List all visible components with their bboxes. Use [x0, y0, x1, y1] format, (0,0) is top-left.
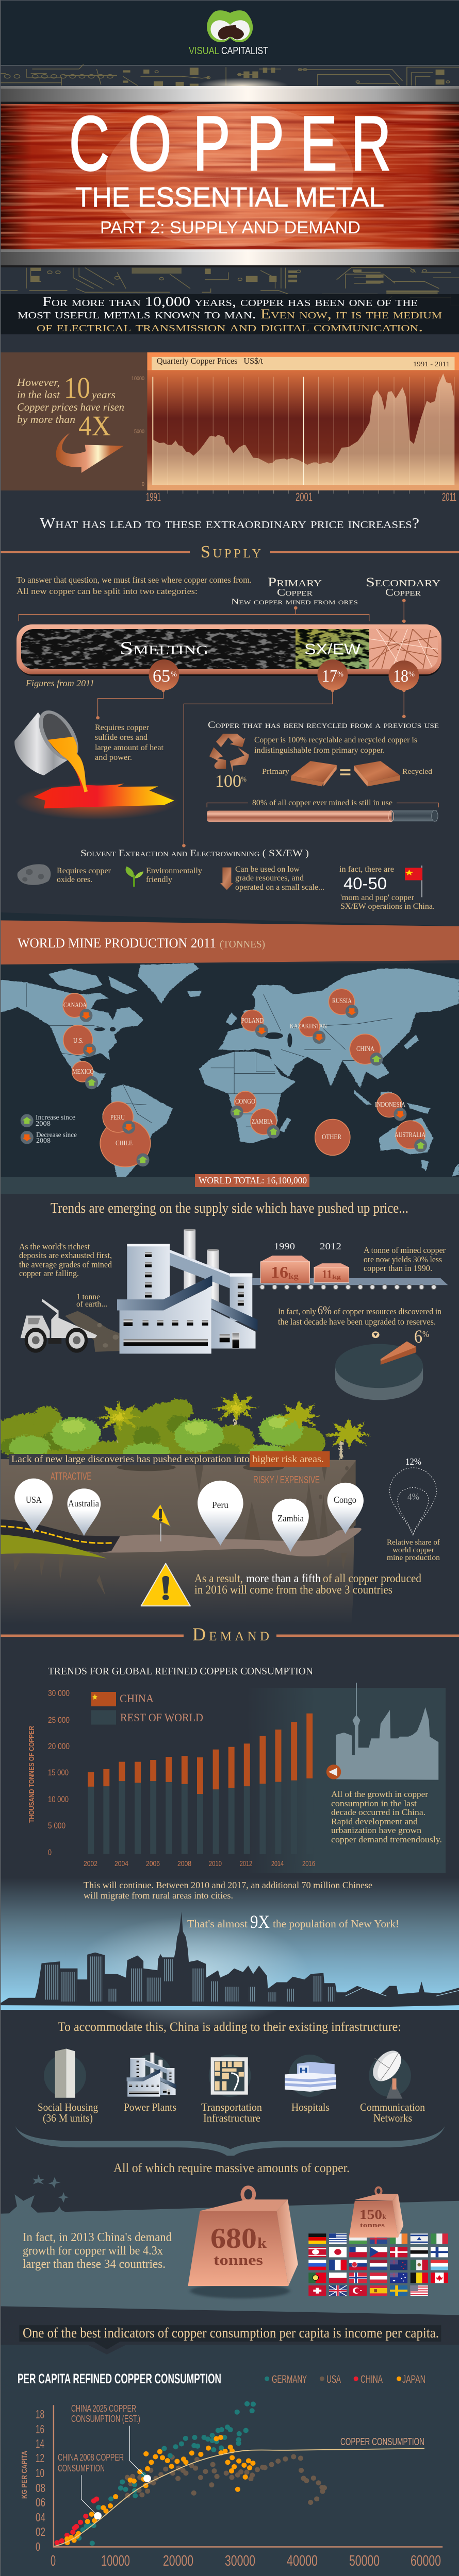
map legend: 2008: [36, 1137, 51, 1145]
panel: china skyline commentary: Rapid development and: [331, 1817, 418, 1826]
bubble: 18 percent: 18: [393, 667, 408, 686]
illustration: cliff with road: [0, 1459, 362, 1625]
infrastructure labels: Power Plants: [124, 2101, 176, 2113]
scatter plot legend: [265, 2374, 425, 2385]
infrastructure labels: Social Housing: [38, 2101, 98, 2113]
country labels: CANADA: [63, 1002, 87, 1009]
bar chart: global refined copper consumption: [27, 1688, 315, 1868]
panel: chinese flag stars and teal band: [0, 2174, 459, 2315]
world total band: [0, 1174, 459, 1194]
banner: world mine production: [0, 920, 459, 964]
text: grades falling: deposits are exhausted first,: [19, 1250, 112, 1260]
panel: 10 year price rise callout: However,: [17, 376, 60, 388]
text: migration: will migrate from rural areas into cities.: [84, 1890, 233, 1901]
chart legend: REST OF WORLD: [120, 1711, 203, 1724]
scatter chart: consumption vs income: CHINA 2025 COPPER: [71, 2403, 136, 2414]
supply intro text: [17, 575, 252, 596]
text: smelting description: Requires copper: [95, 723, 150, 732]
flags: 34 countries: [308, 2233, 448, 2296]
scatter chart: consumption vs income: 50000: [349, 2553, 380, 2569]
conveyor and copper boxes: 1990: [274, 1241, 295, 1251]
map legend: 2008: [36, 1120, 51, 1128]
recycling text: 100: [215, 772, 241, 791]
text: 6 percent upgraded: 6%: [318, 1304, 332, 1317]
country labels: PERU: [110, 1114, 125, 1122]
recycling text: %: [241, 775, 247, 784]
icon: curved copper arrow: [56, 433, 124, 473]
scatter chart: consumption vs income: 14: [36, 2437, 44, 2450]
item: low grade, small scale: operated on a small scale...: [235, 883, 324, 892]
bar chart: global refined copper consumption: THOUSAND TONNES OF COPPER: [27, 1726, 36, 1823]
bar chart: global refined copper consumption: 0: [48, 1848, 52, 1857]
icon: city map: [211, 2057, 248, 2095]
panel: 10 year price rise callout: 10: [64, 371, 90, 404]
bar chart: global refined copper consumption: 2010: [209, 1859, 222, 1868]
weight: china 680k tonnes: tonnes: [214, 2252, 263, 2268]
panel: china skyline commentary: decade occurred in China.: [331, 1807, 425, 1817]
scatter chart: consumption vs income: [20, 2401, 442, 2576]
map legend: Increase since: [36, 1114, 75, 1122]
scatter chart: consumption vs income: CONSUMPTION: [58, 2463, 105, 2473]
chart: relative share pins: [387, 1456, 440, 1562]
capsule: share of copper supply by method: Smelting: [120, 638, 208, 658]
intro text band: of electrical transmission and digital communication.: [37, 319, 423, 334]
country labels: [63, 997, 426, 1147]
heading: infrastructure: To accommodate this, China is adding to their existing infrastructure:: [58, 2020, 401, 2034]
infrastructure labels: Networks: [373, 2112, 412, 2124]
item: oxide ores: Requires copper: [57, 867, 111, 875]
panel: 10 year price rise callout: years: [91, 388, 116, 401]
scatter chart: consumption vs income: 18: [36, 2408, 44, 2421]
text: migration: This will continue. Between 2010 and 2017, an additional 70 million Chinese: [84, 1880, 372, 1890]
chart: quarterly copper prices: [147, 352, 459, 494]
icon: housing tower: [55, 2048, 75, 2098]
recycling text: Copper is 100% recyclable and recycled copper is: [254, 736, 417, 744]
map pins: [14, 1479, 364, 1552]
world total band: WORLD TOTAL: 16,100,000: [199, 1175, 307, 1185]
icon: copper plates equal: [291, 761, 400, 786]
recycling text: [215, 736, 433, 791]
primary / secondary labels: Copper: [277, 587, 313, 598]
primary / secondary labels: Copper: [385, 587, 421, 598]
panel: 10 year price rise callout: Copper prices have risen: [17, 401, 124, 413]
recycling text: indistinguishable from primary copper.: [254, 746, 385, 755]
infrastructure labels: Infrastructure: [203, 2112, 260, 2124]
text: grades falling: the average grades of mined: [19, 1260, 112, 1269]
item: environmentally friendly: friendly: [146, 875, 172, 884]
country labels: MEXICO: [72, 1068, 94, 1076]
chart legend: [91, 1692, 203, 1725]
soft light above the metal bar: [196, 78, 289, 94]
item: mom and pop operations: in fact, there are: [339, 865, 394, 874]
bar chart: global refined copper consumption: 15 000: [48, 1768, 69, 1777]
weight: other countries 150k tonnes: k: [382, 2213, 386, 2221]
panel: china skyline commentary: urbanization have grown: [331, 1825, 422, 1835]
scatter chart: consumption vs income: 12: [36, 2451, 44, 2465]
text band: higher risk areas: [9, 1451, 330, 1467]
infrastructure labels: Communication: [360, 2101, 425, 2113]
recycling text: Primary: [262, 768, 290, 776]
country labels: INDONESIA: [375, 1101, 406, 1109]
map pins: USA: [26, 1495, 42, 1505]
text: 6 percent upgraded: of copper resources discovered in: [334, 1307, 441, 1316]
bubble: 65 percent: [149, 659, 179, 690]
item: environmentally friendly: [126, 867, 202, 887]
bubble: 18 percent: %: [408, 670, 415, 679]
conveyor and copper boxes: kg: [332, 1273, 341, 1280]
label: 1 tonne of earth: 1 tonne: [76, 1293, 100, 1301]
text: more than a fifth: more than a fifth: [246, 1572, 321, 1585]
weight: china 680k tonnes: k: [257, 2235, 267, 2251]
banner: world mine production: (TONNES): [220, 939, 265, 950]
circuit board band bottom: [0, 268, 459, 294]
map legend: [36, 1114, 77, 1145]
chart labels: 2001: [296, 490, 313, 503]
heading: supply: Supply: [201, 543, 261, 562]
country labels: RUSSIA: [332, 997, 352, 1005]
text: smelting description: and power.: [95, 753, 132, 762]
chart labels: 10000: [132, 376, 144, 382]
bar chart: global refined copper consumption: 30 000: [48, 1688, 70, 1698]
country labels: POLAND: [241, 1017, 264, 1025]
capsule: share of copper supply by method: [17, 624, 441, 690]
panel: 10 year price rise callout: 4X: [78, 410, 111, 442]
illustration: new york skyline: [0, 1878, 459, 2030]
chart: relative share pins: Relative share of: [387, 1538, 440, 1547]
item: mom and pop operations: 40-50: [343, 874, 387, 893]
copper still in use pipe: [207, 799, 438, 822]
bar chart: global refined copper consumption: 2004: [114, 1859, 128, 1868]
scatter chart: consumption vs income: 0: [36, 2540, 40, 2553]
scatter chart: consumption vs income: CHINA 2008 COPPER: [58, 2452, 124, 2463]
illustration: jungle trees: [0, 1392, 371, 1461]
chart labels: 5000: [134, 429, 144, 435]
text band: higher risk areas: higher risk areas.: [252, 1454, 324, 1465]
text: demand growth: In fact, in 2013 China's demand: [23, 2231, 172, 2244]
part title: PART 2: SUPPLY AND DEMAND: [100, 218, 360, 238]
panel: 10 year price rise callout: in the last: [17, 388, 60, 401]
chart labels: Quarterly Copper Prices US$/t: [157, 356, 263, 366]
main title: COPPER: [69, 100, 391, 187]
item: mom and pop operations: [339, 865, 435, 911]
chart labels: 0: [142, 481, 144, 487]
intro text band: [0, 294, 459, 334]
bar chart: global refined copper consumption: 2008: [177, 1859, 191, 1868]
scatter chart: consumption vs income: 10000: [101, 2553, 130, 2569]
bubble: 17 percent: %: [337, 670, 343, 679]
scatter chart: consumption vs income: 40000: [287, 2553, 318, 2569]
chart: relative share pins: mine production: [387, 1554, 440, 1562]
text: grades falling: As the world's richest: [19, 1242, 90, 1251]
primary / secondary labels: [231, 575, 440, 606]
pie chart: 6 percent: [335, 1326, 429, 1400]
country labels: CHINA: [356, 1045, 375, 1053]
icon: road warning sign: [151, 1504, 170, 1541]
bubble: 17 percent: 17: [322, 667, 337, 686]
title plate: copper band with silver bars: [0, 86, 459, 267]
scatter chart: consumption vs income: 02: [36, 2525, 45, 2538]
country labels: CHILE: [116, 1140, 133, 1147]
heading: demand: Demand: [192, 1624, 269, 1645]
infrastructure labels: [38, 2101, 425, 2124]
primary / secondary labels: Secondary: [366, 575, 440, 589]
bar chart: global refined copper consumption: 5 000: [48, 1821, 65, 1831]
banner: world mine production: WORLD MINE PRODUCTION 2011: [18, 936, 216, 951]
scatter plot legend: USA: [326, 2374, 341, 2385]
text: yields: [364, 1245, 446, 1273]
circuit board band top: [0, 64, 459, 87]
bubble: 17 percent: [318, 659, 348, 690]
world map section: [0, 912, 459, 1178]
bar chart: global refined copper consumption: 2014: [271, 1859, 284, 1868]
text: demand growth: larger than these 34 countries.: [23, 2258, 166, 2271]
callout: 9x new york: the population of New York!: [273, 1918, 399, 1930]
chart labels: 1991: [146, 490, 161, 503]
item: mom and pop operations: 'mom and pop' copper: [340, 893, 415, 902]
weight: other countries 150k tonnes: [349, 2188, 403, 2238]
bar chart: global refined copper consumption: 10 000: [48, 1794, 69, 1804]
scatter chart: consumption vs income: 04: [36, 2511, 45, 2524]
conveyor and copper boxes: [252, 1241, 448, 1290]
text: 6 percent upgraded: In fact, only: [278, 1307, 316, 1316]
heading: supply: [0, 543, 459, 562]
heading: SX/EW: Solvent Extraction and Electrowinning ( SX/EW ): [80, 848, 309, 859]
weight: china 680k tonnes: [188, 2188, 298, 2298]
callout: 9x new york: That's almost: [187, 1918, 248, 1930]
panel: china skyline commentary: consumption in the last: [331, 1799, 417, 1808]
primary / secondary labels: Primary: [268, 575, 322, 589]
bubbles: countries: [63, 989, 425, 1167]
text: demand growth: [23, 2231, 172, 2271]
heading: demand: [0, 1624, 459, 1645]
country labels: AUSTRALIA: [395, 1131, 426, 1139]
text: smelting description: sulfide ores and: [95, 733, 147, 742]
text: grades falling: copper are falling.: [19, 1268, 79, 1278]
label: 1 tonne of earth: of earth...: [76, 1300, 107, 1309]
country labels: KAZAKHSTAN: [290, 1023, 327, 1030]
chart labels: [132, 356, 456, 503]
panel: china skyline commentary: copper demand tremendously.: [331, 1835, 442, 1844]
scatter chart: consumption vs income: 06: [36, 2496, 45, 2509]
text: more than a fifth: of all copper produced: [323, 1572, 421, 1585]
text: 6 percent upgraded: [278, 1304, 441, 1327]
text: grades falling: [19, 1242, 112, 1278]
scatter chart: consumption vs income: KG PER CAPITA: [20, 2451, 29, 2499]
text: more than a fifth: As a result,: [194, 1572, 243, 1585]
chart: relative share pins: 12%: [405, 1456, 421, 1467]
map legend: Decrease since: [36, 1131, 77, 1139]
chart labels: 1991 - 2011: [413, 361, 450, 368]
infrastructure labels: Transportation: [201, 2101, 262, 2113]
panel: china skyline commentary: All of the growth in copper: [331, 1789, 428, 1799]
subtitle: THE ESSENTIAL METAL: [75, 182, 384, 213]
icon: satellite dish: [368, 2048, 406, 2099]
caption: income per capita: [19, 2325, 441, 2354]
infrastructure labels: Hospitals: [291, 2101, 330, 2113]
callout: 9x new york: 9X: [250, 1911, 270, 1932]
header: logo: [0, 0, 459, 66]
category labels: ATTRACTIVE: [51, 1471, 91, 1482]
bubble: 65 percent: %: [171, 670, 177, 679]
text: smelting description: [95, 723, 164, 762]
category labels: RISKY / EXPENSIVE: [253, 1475, 320, 1486]
bar chart: global refined copper consumption: 25 000: [48, 1715, 70, 1725]
item: low grade, small scale: [220, 865, 324, 892]
bubble: 65 percent: 65: [153, 667, 170, 686]
pie chart: 6 percent: %: [422, 1329, 429, 1339]
chart: relative share pins: 4%: [407, 1492, 419, 1502]
brace: [15, 2126, 445, 2156]
infrastructure labels: (36 M units): [43, 2112, 93, 2124]
recycling text: Recycled: [402, 768, 433, 776]
copper still in use pipe: 80% of all copper ever mined is still in use: [252, 799, 392, 807]
callout: 9x new york: [187, 1911, 399, 1932]
text: yields: copper than in 1990.: [364, 1263, 432, 1273]
bar chart: global refined copper consumption: 2006: [146, 1859, 160, 1868]
label: 1 tonne of earth: [76, 1293, 107, 1309]
bar chart: global refined copper consumption: 20 000: [48, 1741, 70, 1751]
scatter chart: consumption vs income: 08: [36, 2481, 45, 2495]
chart heading: PER CAPITA REFINED COPPER CONSUMPTION: [18, 2371, 221, 2386]
bar chart: global refined copper consumption: 2012: [240, 1859, 252, 1868]
lower background: [0, 2345, 459, 2576]
header: logo: CAPITALIST: [221, 45, 268, 57]
intro text band: most useful metals known to man.: [18, 307, 256, 321]
header: logo: VISUAL: [189, 45, 219, 57]
text: yields: A tonne of mined copper: [364, 1245, 446, 1255]
text band: higher risk areas: Lack of new large discoveries has pushed exploration into: [11, 1454, 250, 1465]
icons: infrastructure types: [44, 2048, 411, 2099]
conveyor and copper boxes: 11: [322, 1268, 332, 1281]
left edge rule: [0, 0, 1, 2576]
item: environmentally friendly: Environmentally: [146, 867, 202, 875]
country labels: CONGO: [235, 1098, 255, 1106]
question heading: What has lead to these extraordinary price increases?: [40, 516, 419, 532]
weight: other countries 150k tonnes: 150: [359, 2207, 382, 2222]
bar chart: global refined copper consumption: 2016: [302, 1859, 315, 1868]
icon: large warning triangle: [141, 1564, 190, 1606]
map: world land masses: [0, 963, 459, 1177]
weight: other countries 150k tonnes: tonnes: [360, 2221, 385, 2229]
capsule: share of copper supply by method: SX/EW: [304, 641, 361, 658]
weight: china 680k tonnes: 680: [210, 2223, 257, 2255]
supply intro text: To answer that question, we must first see where copper comes from.: [17, 575, 252, 585]
illustration: dump truck and earth: [21, 1299, 120, 1353]
scatter plot legend: GERMANY: [272, 2374, 307, 2385]
scatter chart: consumption vs income: CONSUMPTION (EST.): [71, 2414, 140, 2424]
text: massive amounts: All of which require massive amounts of copper.: [113, 2161, 350, 2175]
item: low grade, small scale: grade resources, and: [235, 874, 304, 883]
badges: increase or decrease: [21, 1005, 427, 1166]
illustration: factory: [117, 1229, 257, 1353]
supply intro text: All new copper can be split into two categories:: [17, 586, 198, 596]
item: oxide ores: oxide ores.: [57, 875, 92, 884]
text: demand growth: growth for copper will be 4.3x: [23, 2244, 163, 2258]
panel: 10 year price rise callout: by more than: [17, 413, 75, 426]
scatter chart: consumption vs income: 10: [36, 2466, 44, 2480]
item: oxide ores: [18, 864, 111, 885]
panel: china skyline commentary: [246, 1683, 446, 1873]
country labels: OTHER: [322, 1133, 342, 1141]
scatter chart: consumption vs income: 20000: [163, 2553, 193, 2569]
heading: global consumption trends: TRENDS FOR GLOBAL REFINED COPPER CONSUMPTION: [48, 1666, 313, 1677]
scatter chart: consumption vs income: 60000: [411, 2553, 441, 2569]
icon: ladle pouring molten copper: [14, 707, 178, 820]
icon: hospital: H: [299, 2066, 308, 2075]
text: more than a fifth: [194, 1572, 421, 1596]
primary / secondary labels: New copper mined from ores: [231, 597, 358, 606]
chart legend: CHINA: [120, 1692, 154, 1705]
country labels: ZAMBIA: [252, 1118, 273, 1126]
panel: 10 year price rise callout: [0, 352, 147, 490]
icon: power plant: [127, 2053, 176, 2097]
country labels: U.S.: [73, 1037, 84, 1045]
item: mom and pop operations: SX/EW operations in China.: [340, 902, 435, 911]
intro text band: Even now, it is the medium: [260, 307, 442, 321]
map pins: Peru: [212, 1500, 228, 1510]
pie chart: 6 percent: 6: [414, 1326, 422, 1347]
heading: supply trends: Trends are emerging on the supply side which have pushed up price...: [51, 1200, 408, 1216]
chart: relative share pins: world copper: [392, 1546, 434, 1554]
figures note: Figures from 2011: [25, 678, 94, 688]
text: more than a fifth: in 2016 will come from the above 3 countries: [194, 1583, 392, 1596]
map pins: Zambia: [277, 1513, 304, 1523]
conveyor and copper boxes: 16: [271, 1263, 288, 1281]
text: 6 percent upgraded: the last decade have been upgraded to reserves.: [278, 1317, 436, 1327]
intro text band: For more than 10,000 years, copper has been one of the: [42, 294, 418, 309]
scatter chart: consumption vs income: 0: [51, 2553, 56, 2569]
map pins: Australia: [68, 1498, 99, 1509]
bar chart: global refined copper consumption: 2002: [84, 1859, 97, 1868]
text: yields: ore now yields 30% less: [364, 1255, 442, 1264]
bubble: 18 percent: [389, 660, 419, 690]
scatter chart: consumption vs income: 16: [36, 2422, 44, 2436]
conveyor and copper boxes: 2012: [320, 1241, 341, 1251]
connector lines: [19, 599, 406, 848]
conveyor and copper boxes: kg: [288, 1272, 299, 1281]
heading: recycled copper: Copper that has been recycled from a previous use: [208, 720, 439, 731]
map pins: Congo: [334, 1495, 356, 1505]
item: low grade, small scale: Can be used on low: [235, 865, 300, 874]
scatter plot legend: JAPAN: [402, 2374, 425, 2385]
category labels: [51, 1471, 320, 1486]
text: smelting description: large amount of heat: [95, 743, 164, 752]
scatter plot legend: CHINA: [360, 2374, 383, 2385]
scatter chart: consumption vs income: 30000: [225, 2553, 255, 2569]
icon: hospital: [285, 2062, 336, 2092]
icon: recycling symbol: [209, 734, 249, 772]
text: migration: [84, 1880, 372, 1901]
